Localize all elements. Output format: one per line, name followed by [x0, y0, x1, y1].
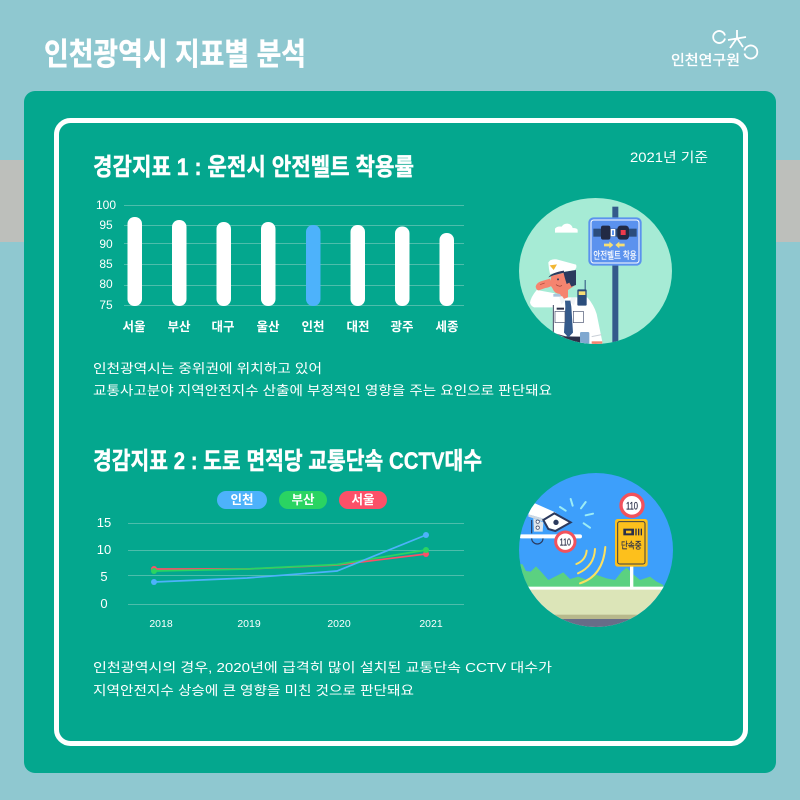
heading: indicator 1: 경감지표 1 : 운전시 안전벨트 착용률 — [93, 154, 414, 181]
line chart: CCTV count — [97, 515, 464, 630]
enforcement sign — [615, 519, 648, 567]
inner frame — [56, 120, 746, 744]
bar chart: seatbelt use: 80 — [99, 277, 113, 291]
flash marks — [560, 499, 593, 528]
sign pole — [630, 565, 633, 588]
body text: indicator 1 — [93, 361, 552, 398]
cloud — [555, 224, 578, 233]
bar chart: seatbelt use: 부산 — [167, 320, 191, 334]
legend: 부산 — [291, 493, 315, 507]
line chart: CCTV count: 2020 — [327, 618, 351, 630]
body text: indicator 2 — [93, 660, 552, 698]
bar chart: seatbelt use: 대전 — [346, 320, 370, 334]
pockets — [555, 311, 565, 323]
line chart: CCTV count: 2018 — [149, 618, 173, 630]
legend: 서울 — [351, 493, 375, 507]
speed limit sign: top — [621, 494, 643, 516]
enforcement sign: 단속중 — [621, 541, 642, 551]
illustration: police officer and seatbelt sign — [515, 195, 675, 350]
bar chart: seatbelt use: 90 — [99, 237, 113, 251]
bar chart: seatbelt use: 대구 — [211, 320, 235, 334]
bar chart: seatbelt use: 100 — [96, 198, 116, 212]
line chart: CCTV count: 5 — [100, 569, 108, 584]
camera — [528, 503, 571, 532]
line chart: CCTV count: 2021 — [419, 618, 443, 630]
bar chart: seatbelt use — [96, 198, 464, 334]
officer body — [530, 290, 603, 347]
reference year note: 2021년 기준 — [630, 150, 708, 165]
side strip: right — [776, 160, 800, 242]
line chart: CCTV count: 15 — [97, 515, 111, 530]
illustration: speed camera and sign — [513, 470, 677, 630]
legend — [217, 491, 387, 509]
bar chart: seatbelt use: 광주 — [390, 320, 414, 334]
legend: 인천 — [230, 493, 254, 507]
bar chart: seatbelt use: 울산 — [256, 320, 280, 334]
speed limit sign: camera: 110 — [560, 537, 571, 548]
signal waves — [576, 547, 605, 583]
bar chart: seatbelt use: 서울 — [122, 320, 146, 334]
body text: indicator 1: 교통사고분야 지역안전지수 산출에 부정적인 영향을 주는 요인으로 판단돼요 — [93, 383, 552, 398]
bar chart: seatbelt use: 세종 — [435, 320, 459, 334]
body text: indicator 2: 인천광역시의 경우, 2020년에 급격히 많이 설치된 교통단속 CCTV 대수가 — [93, 660, 552, 675]
side strip: left — [0, 160, 24, 242]
road verge — [529, 588, 663, 627]
grass — [517, 564, 663, 589]
speed limit sign: camera — [556, 532, 575, 551]
bar chart: seatbelt use: 인천 — [301, 320, 325, 334]
sign post — [612, 207, 618, 347]
line chart: CCTV count: 0 — [100, 596, 108, 611]
bar chart: seatbelt use: 85 — [99, 257, 113, 271]
logo: Incheon Institute — [671, 30, 757, 68]
bar chart: seatbelt use: 75 — [99, 298, 113, 312]
body text: indicator 1: 인천광역시는 중위권에 위치하고 있어 — [93, 361, 322, 376]
heading: indicator 2: 경감지표 2 : 도로 면적당 교통단속 CCTV대수 — [93, 448, 482, 475]
speed limit sign: top: 110 — [626, 500, 638, 512]
officer arm — [536, 279, 552, 290]
radio — [577, 289, 587, 306]
logo: Incheon Institute: 인천연구원 — [671, 52, 740, 68]
line chart: CCTV count: 2019 — [237, 618, 261, 630]
title: 인천광역시 지표별 분석 — [44, 37, 306, 72]
collar and tie — [559, 296, 576, 305]
line chart: CCTV count: 10 — [97, 542, 111, 557]
seatbelt sign: 안전벨트 착용 — [593, 250, 637, 262]
body text: indicator 2: 지역안전지수 상승에 큰 영향을 미친 것으로 판단돼요 — [93, 683, 414, 698]
camera arm — [519, 534, 582, 538]
officer head — [550, 273, 574, 299]
bar chart: seatbelt use: 95 — [99, 218, 113, 232]
